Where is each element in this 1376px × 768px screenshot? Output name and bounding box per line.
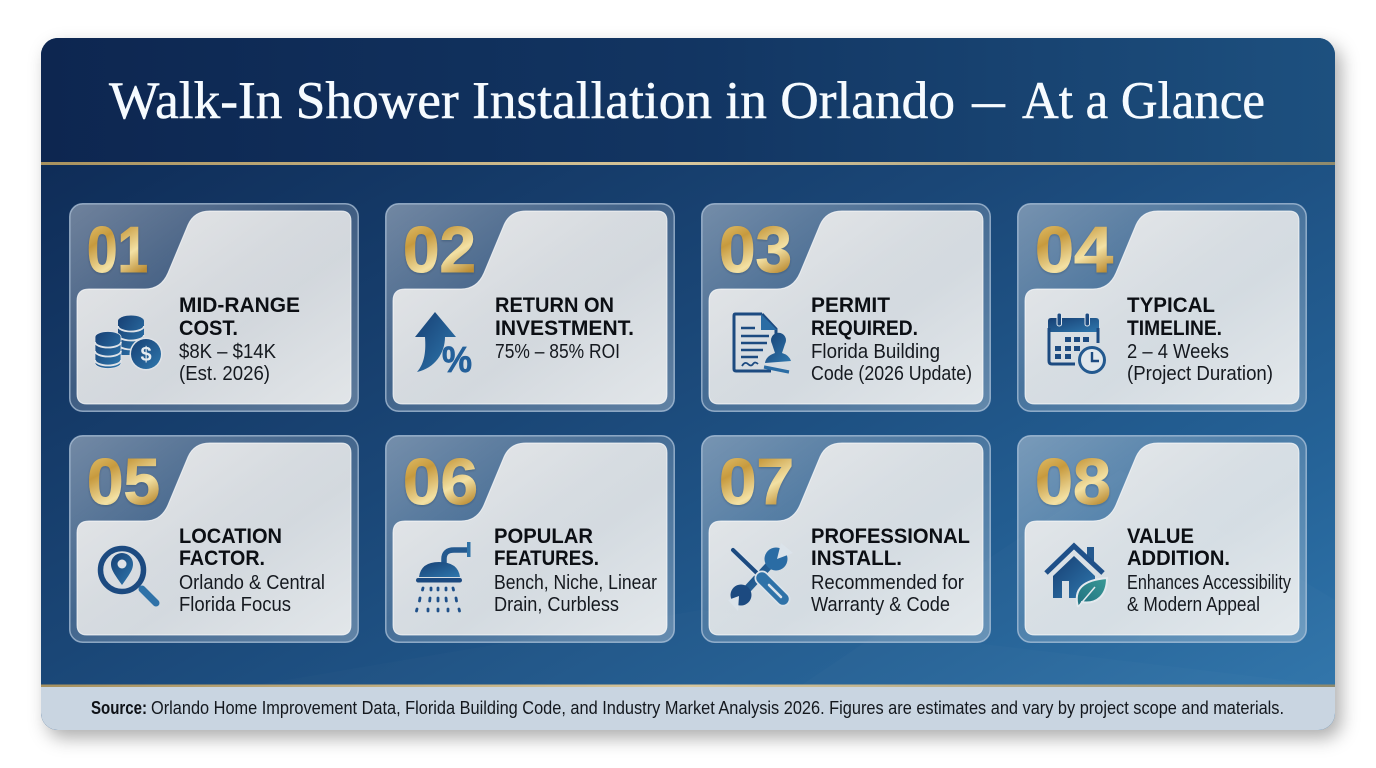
panel: card 07 professional install: Warranty & Code xyxy=(811,593,950,616)
panel: card 06 popular features: POPULAR xyxy=(494,525,593,548)
panel: card 01 mid-range cost: 01 xyxy=(87,213,148,286)
panel: card 01 mid-range cost: COST. xyxy=(179,317,238,340)
icon: house with leaf xyxy=(1046,546,1107,607)
panel: card 01 mid-range cost: (Est. 2026) xyxy=(179,362,270,385)
panel: card 02 return on investment: 75% – 85% ROI xyxy=(495,340,620,363)
panel: card 01 mid-range cost xyxy=(70,204,358,411)
panel: card 07 professional install: PROFESSIONAL xyxy=(811,525,970,548)
icon: magnifier with pin xyxy=(100,548,156,603)
panel: card 01 mid-range cost: $8K – $14K xyxy=(179,340,276,363)
panel: card 02 return on investment: 02 xyxy=(403,213,476,286)
panel: card 02 return on investment: INVESTMENT. xyxy=(495,317,634,340)
panel: card 05 location factor xyxy=(70,436,358,642)
icon: coins xyxy=(95,316,162,370)
panel: card 06 popular features: Drain, Curbless xyxy=(494,593,619,616)
panel: card 05 location factor: FACTOR. xyxy=(179,547,265,570)
title: Walk-In Shower Installation in Orlando xyxy=(109,72,955,130)
panel: card 08 value addition: VALUE xyxy=(1127,525,1194,548)
panel: card 05 location factor: Orlando & Central xyxy=(179,571,325,594)
panel: card 05 location factor: Florida Focus xyxy=(179,593,291,616)
panel: card 06 popular features: FEATURES. xyxy=(494,547,599,570)
panel: card 04 typical timeline: 04 xyxy=(1035,213,1113,286)
panel: card 08 value addition: ADDITION. xyxy=(1127,547,1230,570)
panel: card 08 value addition: Enhances Accessibility xyxy=(1127,571,1292,594)
icon: document with stamp xyxy=(734,314,791,372)
panel: card 05 location factor: 05 xyxy=(87,445,160,518)
icon: arrow up with percent: % xyxy=(442,339,472,380)
panel: card 08 value addition: 08 xyxy=(1035,445,1111,518)
title: — xyxy=(971,72,1006,130)
panel: card 07 professional install: 07 xyxy=(719,445,794,518)
icon: arrow up with percent xyxy=(415,312,472,380)
panel: card 03 permit required xyxy=(702,204,990,411)
panel: card 05 location factor: LOCATION xyxy=(179,525,282,548)
panel: card 04 typical timeline xyxy=(1018,204,1306,411)
panel: card 08 value addition xyxy=(1018,436,1306,642)
panel: card 07 professional install: INSTALL. xyxy=(811,547,902,570)
icon: shower head xyxy=(416,542,470,611)
panel: card 04 typical timeline: TYPICAL xyxy=(1127,294,1215,317)
icon: wrench and screwdriver xyxy=(728,543,793,611)
panel: card 06 popular features: Bench, Niche, Linear xyxy=(494,571,657,594)
panel: card 02 return on investment xyxy=(386,204,674,411)
icon: coins: $ xyxy=(140,344,152,366)
panel: card 08 value addition: & Modern Appeal xyxy=(1127,593,1260,616)
panel: card 03 permit required: 03 xyxy=(719,213,792,286)
panel: card 04 typical timeline: (Project Duration) xyxy=(1127,362,1273,385)
panel: card 04 typical timeline: TIMELINE. xyxy=(1127,317,1222,340)
panel: card 03 permit required: PERMIT xyxy=(811,294,890,317)
source footer text: Source: xyxy=(91,697,147,718)
title: At a Glance xyxy=(1022,72,1265,130)
panel: card 03 permit required: Code (2026 Update) xyxy=(811,362,972,385)
panel: card 03 permit required: Florida Building xyxy=(811,340,940,363)
panel: card 06 popular features: 06 xyxy=(403,445,478,518)
panel: card 03 permit required: REQUIRED. xyxy=(811,317,918,340)
panel: card 06 popular features xyxy=(386,436,674,642)
panel: card 04 typical timeline: 2 – 4 Weeks xyxy=(1127,340,1229,363)
icon: calendar with clock xyxy=(1048,313,1104,372)
panel: card 01 mid-range cost: MID-RANGE xyxy=(179,294,300,317)
panel: card 02 return on investment: RETURN ON xyxy=(495,294,614,317)
panel: card 07 professional install: Recommended for xyxy=(811,571,964,594)
panel: card 07 professional install xyxy=(702,436,990,642)
